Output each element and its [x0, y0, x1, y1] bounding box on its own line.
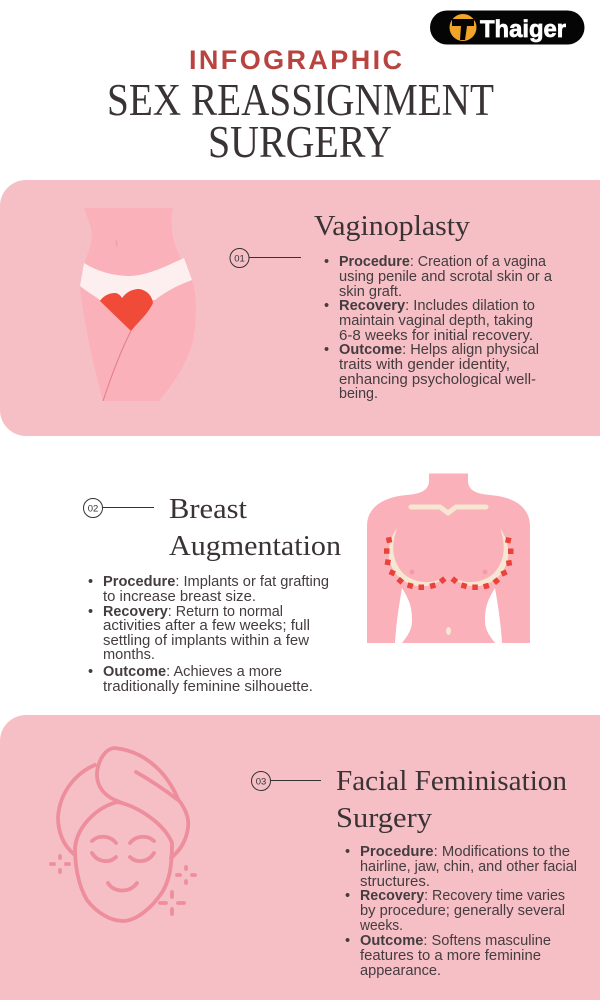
- text block: facial feminisation details: features to a more feminine: [360, 948, 541, 964]
- text block: vaginoplasty details: traits with gender identity,: [339, 357, 510, 373]
- text block: vaginoplasty details: [324, 254, 553, 402]
- title: SEX REASSIGNMENT: [107, 75, 494, 125]
- text block: facial feminisation details: Procedure: Modifications to the: [360, 844, 570, 860]
- text block: breast augmentation details: Outcome: Achieves a more: [103, 664, 282, 680]
- illustration: lower body with heart: [80, 208, 196, 401]
- number marker 03: [252, 772, 321, 790]
- title: SURGERY: [208, 117, 392, 167]
- panel: facial feminisation surgery: [0, 715, 600, 1000]
- text block: vaginoplasty details: •: [324, 298, 329, 314]
- heading: Breast Augmentation: [169, 494, 341, 562]
- number marker 02: 02: [88, 504, 98, 514]
- panel: vaginoplasty: [0, 180, 600, 436]
- text block: breast augmentation details: Procedure: Implants or fat grafting: [103, 574, 329, 590]
- panel: breast augmentation: [84, 474, 530, 695]
- logo: Thaiger: [430, 10, 584, 44]
- text block: facial feminisation details: •: [345, 933, 350, 949]
- text block: breast augmentation details: [88, 574, 329, 695]
- illustration: chest: [367, 474, 530, 643]
- text block: vaginoplasty details: 6-8 weeks for initial recovery.: [339, 328, 533, 344]
- heading: Breast Augmentation: Breast: [169, 494, 247, 525]
- illustration: face with towel: [51, 748, 195, 921]
- text block: vaginoplasty details: •: [324, 342, 329, 358]
- text block: vaginoplasty details: being.: [339, 386, 378, 402]
- heading: Facial Feminisation Surgery: [336, 766, 567, 834]
- title: [107, 45, 494, 167]
- logo: Thaiger: Thaiger: [480, 16, 566, 43]
- text block: breast augmentation details: activities after a few weeks; full: [103, 618, 310, 634]
- heading: Facial Feminisation Surgery: Facial Feminisation: [336, 766, 567, 797]
- text block: vaginoplasty details: using penile and scrotal skin or a: [339, 269, 553, 285]
- text block: facial feminisation details: weeks.: [359, 918, 403, 934]
- text block: vaginoplasty details: enhancing psychological well-: [339, 372, 536, 388]
- heading: Vaginoplasty: Vaginoplasty: [314, 211, 470, 242]
- text block: vaginoplasty details: Outcome: Helps align physical: [339, 342, 539, 358]
- text block: facial feminisation details: hairline, jaw, chin, and other facial: [360, 859, 577, 875]
- text block: breast augmentation details: Recovery: Return to normal: [103, 604, 283, 620]
- text block: facial feminisation details: appearance.: [360, 963, 441, 979]
- text block: facial feminisation details: Outcome: Softens masculine: [360, 933, 551, 949]
- text block: breast augmentation details: settling of implants within a few: [103, 633, 310, 649]
- text block: vaginoplasty details: skin graft.: [339, 284, 402, 300]
- text block: breast augmentation details: •: [88, 664, 93, 680]
- text block: vaginoplasty details: Recovery: Includes dilation to: [339, 298, 535, 314]
- title: INFOGRAPHIC: [189, 45, 402, 75]
- text block: facial feminisation details: by procedure; generally several: [360, 903, 565, 919]
- number marker 02: [84, 498, 154, 518]
- text block: breast augmentation details: to increase breast size.: [103, 589, 256, 605]
- text block: breast augmentation details: traditionally feminine silhouette.: [103, 679, 313, 695]
- text block: facial feminisation details: •: [345, 844, 350, 860]
- number marker 01: 01: [234, 254, 245, 264]
- text block: vaginoplasty details: maintain vaginal depth, taking: [339, 313, 533, 329]
- number marker 03: 03: [256, 776, 266, 788]
- text block: vaginoplasty details: Procedure: Creation of a vagina: [339, 254, 547, 270]
- text block: facial feminisation details: Recovery: Recovery time varies: [360, 888, 565, 904]
- text block: facial feminisation details: structures.: [360, 874, 430, 890]
- heading: Breast Augmentation: Augmentation: [169, 531, 341, 562]
- text block: facial feminisation details: •: [345, 888, 350, 904]
- heading: Facial Feminisation Surgery: Surgery: [336, 803, 432, 834]
- text block: facial feminisation details: [345, 844, 577, 979]
- number marker 01: [230, 248, 301, 268]
- text block: vaginoplasty details: •: [324, 254, 329, 270]
- text block: breast augmentation details: •: [88, 604, 93, 620]
- text block: breast augmentation details: months.: [103, 647, 155, 663]
- text block: breast augmentation details: •: [88, 574, 93, 590]
